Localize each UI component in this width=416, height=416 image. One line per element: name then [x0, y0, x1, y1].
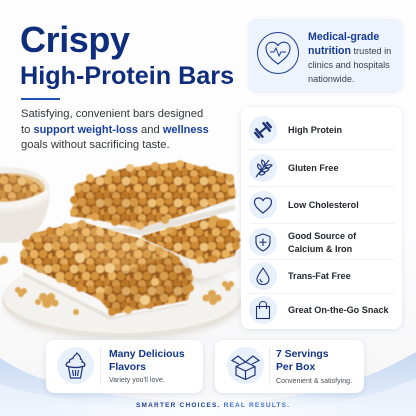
benefit: calcium and iron: Good Source of [288, 231, 356, 241]
crumbs [0, 256, 234, 315]
title: High-Protein Bars [20, 62, 234, 90]
benefit: high protein: High Protein [288, 125, 342, 135]
medical text: clinics and hospitals [308, 60, 390, 70]
benefit: high protein [249, 116, 342, 144]
servings text: Per Box [276, 362, 315, 373]
medical text: nationwide. [308, 74, 354, 84]
title underline [21, 98, 60, 100]
title: Crispy [20, 19, 130, 60]
medical text: nutrition trusted in [308, 45, 391, 57]
benefit: trans-fat free [249, 262, 351, 290]
panel: servings per box: Convenient & satisfying. [276, 377, 352, 385]
icon: dumbbell [249, 116, 277, 144]
flavors text [109, 349, 185, 373]
benefit: gluten free: Gluten Free [288, 163, 339, 173]
benefit: on-the-go snack [249, 296, 389, 324]
benefit: low cholesterol [249, 191, 359, 219]
medical text [308, 31, 391, 84]
icon: shield plus [249, 228, 277, 256]
icon: bag [249, 296, 277, 324]
panel: many delicious flavors [46, 340, 203, 393]
servings text [276, 349, 329, 373]
icon: heart [249, 191, 277, 219]
panel: benefits list [241, 107, 402, 329]
table surface [0, 230, 416, 416]
benefit: on-the-go snack: Great On-the-Go Snack [288, 305, 389, 315]
panel: many delicious flavors: Variety you'll love. [109, 377, 165, 384]
top bar [70, 160, 236, 235]
icon: drop [249, 262, 277, 290]
benefit: calcium and iron: Calcium & Iron [288, 244, 352, 254]
plate [2, 259, 242, 340]
benefit: trans-fat free: Trans-Fat Free [288, 271, 351, 281]
panel: medical-grade callout [249, 19, 402, 91]
medical text: Medical-grade [308, 31, 379, 43]
divider [269, 347, 270, 385]
flavors text: Many Delicious [109, 349, 185, 360]
title [20, 19, 234, 90]
intro text: Satisfying, convenient bars designed [21, 108, 203, 120]
benefit: gluten free [249, 154, 339, 182]
intro text: to support weight-loss and wellness [21, 124, 209, 136]
flavors text: Flavors [109, 362, 146, 373]
back bar [143, 215, 240, 283]
benefit: calcium and iron [249, 228, 356, 256]
bowl [0, 167, 50, 243]
icon: wheat [249, 154, 277, 182]
benefit: low cholesterol: Low Cholesterol [288, 200, 359, 210]
panel: servings per box [215, 340, 364, 393]
intro text [21, 108, 209, 151]
tagline: SMARTER CHOICES. REAL RESULTS. [136, 402, 290, 409]
icon: cupcake [57, 347, 94, 384]
divider [100, 347, 101, 385]
blue wave [0, 352, 416, 416]
servings text: 7 Servings [276, 349, 329, 360]
front bar [20, 220, 194, 320]
icon: heart with pulse [257, 32, 299, 74]
intro text: goals without sacrificing taste. [21, 139, 170, 151]
icon: open box [227, 347, 264, 384]
